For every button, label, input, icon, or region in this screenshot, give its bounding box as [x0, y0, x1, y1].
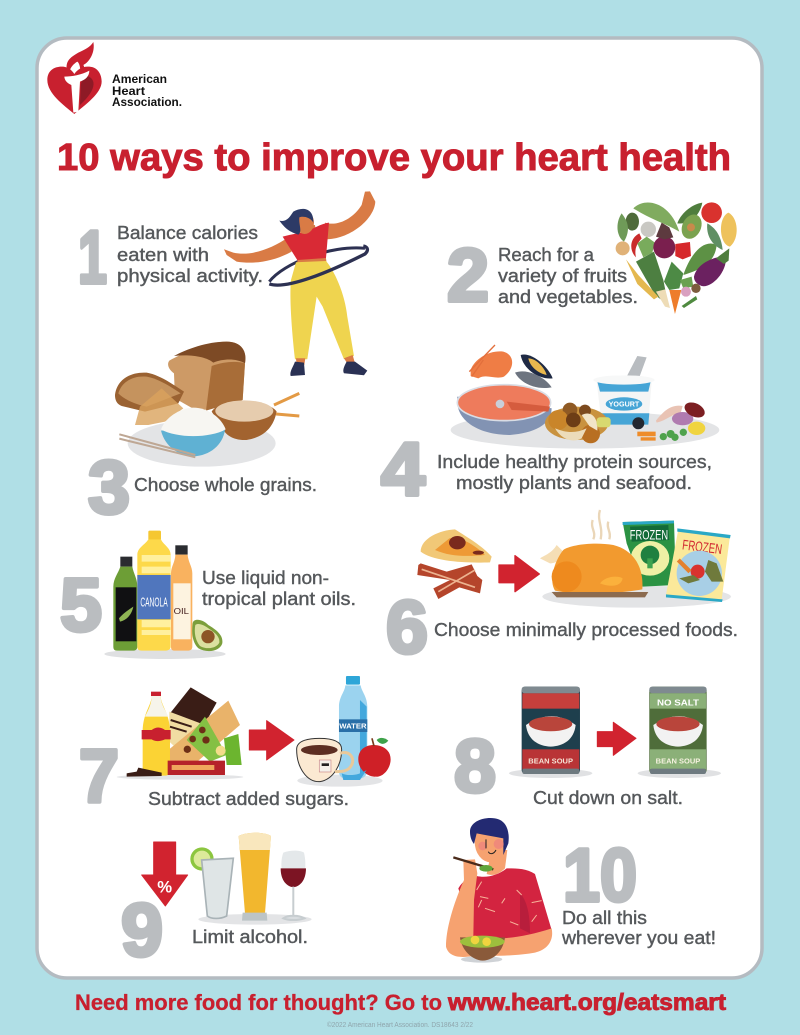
tip 1: balance calories: Balance calories	[117, 222, 258, 243]
tip 8: cut down on salt: Cut down on salt.	[533, 787, 683, 808]
tip 2: fruits and vegetables	[447, 202, 737, 317]
icon: soup cans: BEAN SOUP	[656, 756, 700, 765]
tip 5: liquid plant oils: Use liquid non-	[202, 567, 329, 588]
icon: soup cans: BEAN SOUP	[528, 756, 573, 765]
tip 5: liquid plant oils: 5	[60, 563, 102, 647]
icon: oil bottles and avocado	[104, 531, 226, 659]
tip 8: cut down on salt: 8	[454, 724, 496, 808]
tip 10: do all this wherever you eat: Do all this	[562, 907, 647, 928]
icon: down arrow and drinks: %	[157, 878, 172, 897]
tip 2: fruits and vegetables: variety of fruits	[498, 265, 627, 286]
tip 4: healthy protein	[381, 345, 719, 511]
tip 4: healthy protein: mostly plants and seafood.	[456, 472, 692, 493]
icon: oil bottles and avocado: CANOLA	[140, 596, 168, 610]
icon: processed foods to turkey and frozen vegetables: FROZEN	[681, 536, 723, 557]
tip 2: fruits and vegetables: Reach for a	[498, 244, 595, 265]
tip 1: balance calories: physical activity.	[117, 265, 263, 286]
tip 10: do all this wherever you eat: wherever you eat!	[561, 927, 716, 948]
tip 6: minimally processed foods	[386, 510, 738, 669]
tip 4: healthy protein: 4	[381, 427, 425, 511]
tip 6: minimally processed foods: 6	[386, 585, 428, 669]
icon: down arrow and drinks	[142, 833, 312, 925]
icon: oil bottles and avocado: OIL	[174, 606, 189, 616]
tip 9: limit alcohol: 9	[121, 888, 163, 972]
tip 1: balance calories: 1	[78, 215, 107, 299]
tip 3: whole grains: 3	[88, 445, 130, 529]
icon: woman with hula hoop	[224, 191, 375, 376]
footer call to action: Need more food for thought? Go to	[75, 990, 442, 1015]
tip 5: liquid plant oils: tropical plant oils.	[202, 588, 356, 609]
tip 8: cut down on salt	[454, 687, 721, 808]
tip 2: fruits and vegetables: 2	[447, 233, 489, 317]
tip 10: do all this wherever you eat	[446, 818, 716, 963]
tip 7: subtract added sugars: 7	[79, 734, 119, 818]
tip 3: whole grains	[88, 342, 317, 529]
footer link: www.heart.org/eatsmart	[447, 989, 726, 1015]
icon: sugary snacks to water, tea and apple: WATER	[339, 722, 367, 731]
icon: soup cans: NO SALT	[657, 697, 699, 707]
icon: soup cans	[509, 687, 721, 778]
tip 2: fruits and vegetables: and vegetables.	[498, 286, 638, 307]
icon: processed foods to turkey and frozen vegetables	[417, 510, 731, 608]
logo: American Heart Association	[47, 42, 182, 114]
icon: bread and rice bowls	[115, 342, 299, 467]
tip 9: limit alcohol	[121, 833, 312, 972]
icon: processed foods to turkey and frozen vegetables: FROZEN	[630, 526, 668, 542]
tip 7: subtract added sugars	[79, 676, 391, 818]
title: 10 ways to improve your heart health	[57, 137, 731, 179]
icon: seafood, nuts, yogurt	[451, 345, 719, 449]
tip 10: do all this wherever you eat: 10	[563, 833, 637, 917]
tip 1: balance calories	[78, 191, 375, 376]
logo: American Heart Association: American	[112, 72, 167, 86]
tip 3: whole grains: Choose whole grains.	[134, 474, 317, 495]
tip 6: minimally processed foods: Choose minimally processed foods.	[434, 619, 738, 640]
copyright note: ©2022 American Heart Association. DS18643 2/22	[327, 1021, 473, 1029]
icon: seafood, nuts, yogurt: YOGURT	[609, 402, 640, 409]
tip 9: limit alcohol: Limit alcohol.	[192, 926, 308, 947]
icon: heart of vegetables	[616, 202, 737, 314]
tip 4: healthy protein: Include healthy protein sources,	[437, 451, 712, 472]
tip 7: subtract added sugars: Subtract added sugars.	[148, 788, 349, 809]
icon: man eating a bowl of food	[446, 818, 552, 963]
tip 5: liquid plant oils	[60, 531, 356, 659]
icon: sugary snacks to water, tea and apple	[117, 676, 391, 787]
logo: American Heart Association: Association.	[112, 95, 182, 109]
logo: American Heart Association: Heart	[112, 84, 145, 98]
tip 1: balance calories: eaten with	[117, 244, 209, 265]
